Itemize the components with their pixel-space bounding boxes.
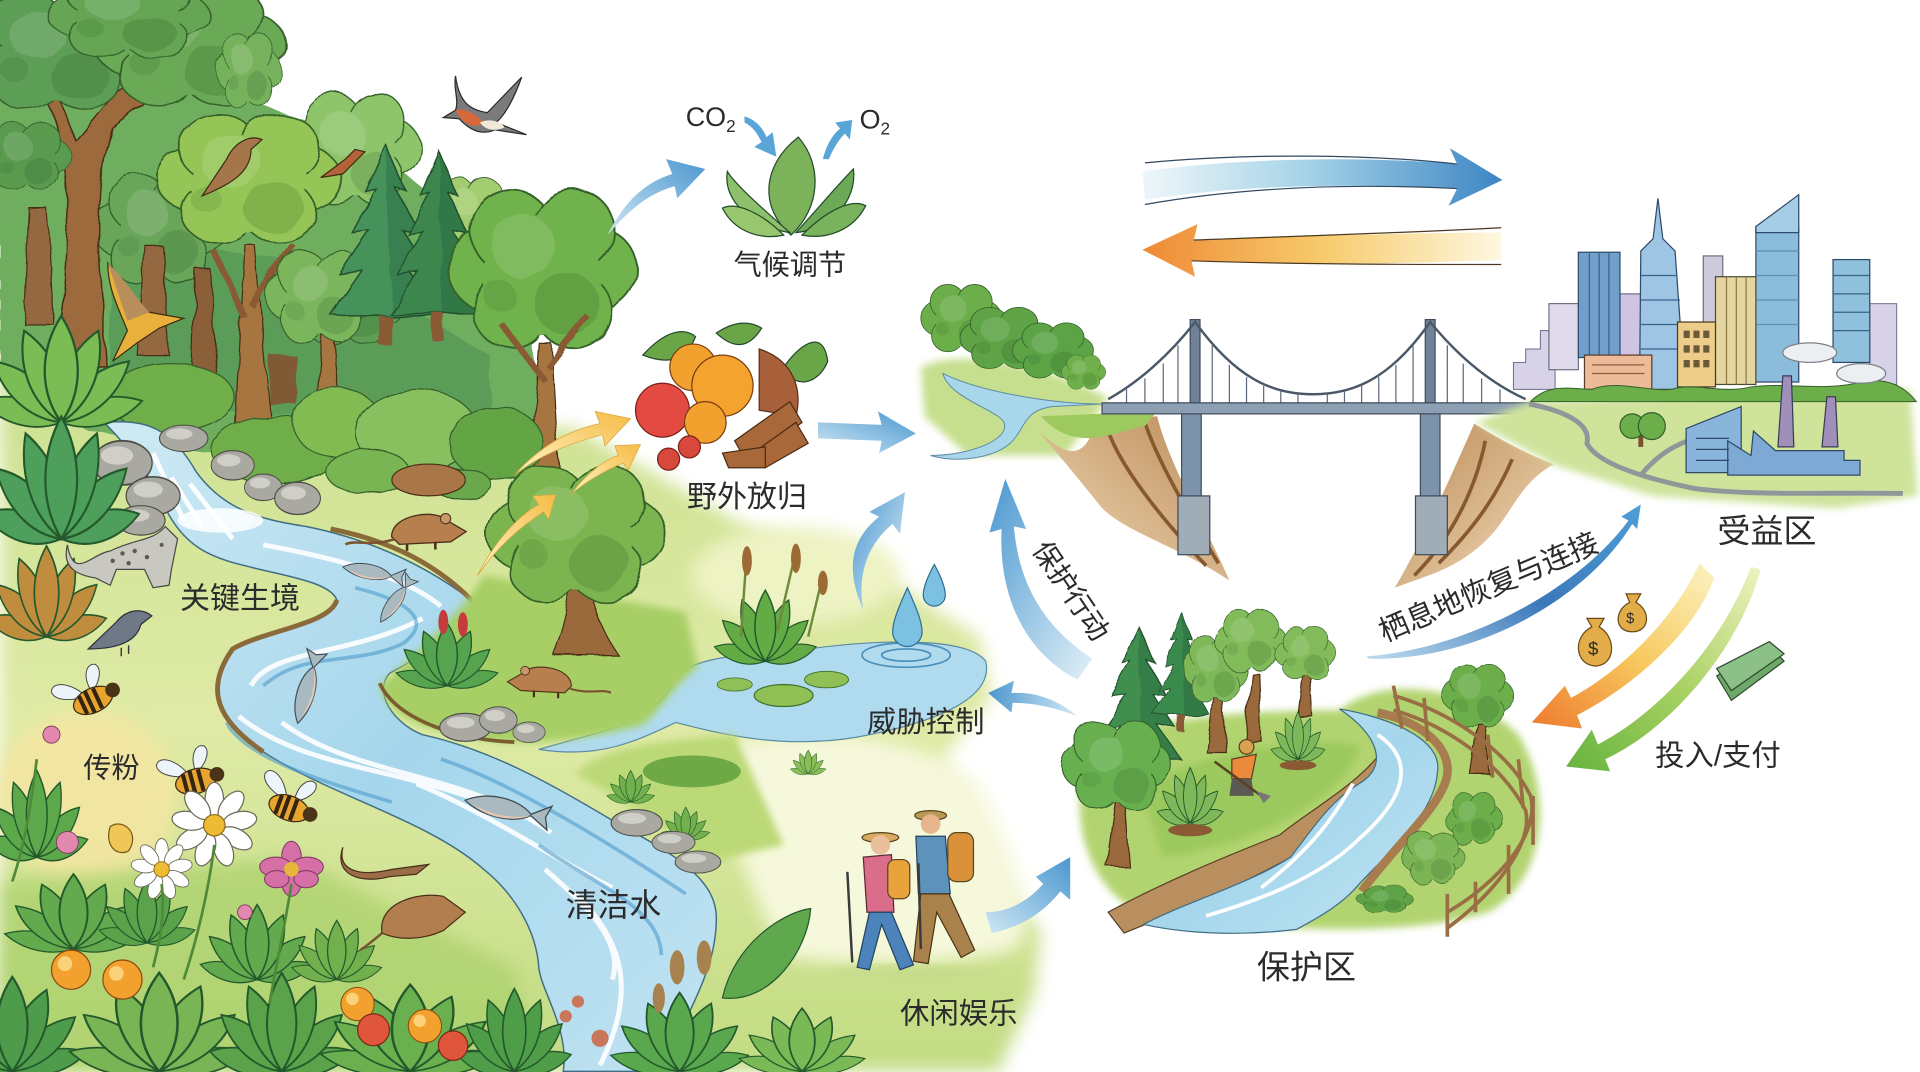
right bank wall [1362,713,1448,891]
bridge [1102,320,1529,555]
conservation land [1080,689,1540,929]
arrow: top left orange [1142,224,1501,277]
panel: conservation area [1062,610,1540,937]
icon: perched brown bird [202,138,262,196]
upland shrubs [606,750,827,842]
icon: small red bird [321,149,365,178]
icon: city skyline [1513,195,1897,389]
river bank left [217,600,337,752]
label: key habitat: 关键生境 [180,583,300,616]
waterfall rocks [93,425,320,535]
icon: orange fruits [51,950,468,1060]
arrow: top right blue [1142,148,1502,206]
icon: flying bird [443,76,527,135]
arrow: conservation action [989,479,1092,680]
icon: burrowing animal [392,464,465,496]
lily pads [717,671,849,707]
lawn [1139,742,1359,857]
label: pollination: 传粉 [83,753,140,784]
island rocks [440,707,545,743]
forest [0,0,637,498]
fence [1393,686,1533,937]
big tree [0,0,285,367]
bottom right reeds and leaves [608,909,867,1072]
icon: planting worker [1215,740,1271,803]
arrow: pond up [853,492,905,610]
label: conservation action: 保护行动 [1026,536,1115,646]
label: beneficiary area: 受益区 [1717,513,1816,550]
right cliff [1395,424,1554,588]
stream to pond [539,642,987,752]
arrow: yellow two [514,411,631,475]
icon: fish group [288,558,552,830]
label: habitat restoration and connection: 栖息地恢复与连接 [1374,526,1604,649]
icon: money bags [1578,594,1646,666]
river ripples [153,453,621,1065]
CO2 label: 2 [726,116,736,136]
label: recreation: 休闲娱乐 [900,998,1018,1031]
pale meadow [722,735,1026,964]
conifers [332,144,487,345]
icon: lizard [341,847,429,879]
label: clean water: 清洁水 [566,887,661,923]
upland bank [576,735,784,863]
icon: seedlings [1156,712,1326,836]
tree line [1531,381,1916,402]
foam [178,508,263,533]
arrow: products to bridge [818,411,916,453]
arrow: yellow three [571,444,640,495]
foreground foliage [0,770,574,1072]
arrow: habitat restoration [1367,504,1641,659]
icon: money bags: $ [1626,611,1634,627]
icon: climate leaves [722,137,866,237]
icon: water drops [893,564,945,647]
icon: small trees [1620,413,1665,447]
arrow: yellow one [478,495,556,575]
road [1529,404,1903,493]
icon: island rodent [507,666,611,698]
left plants [0,316,145,647]
flow arrows [478,116,1761,933]
icon: bees [48,658,328,830]
arrow: green payment [1566,567,1761,771]
arrow: O2 out [823,120,852,159]
O2 label: 2 [881,119,890,139]
CO2 label: CO [686,102,726,132]
trees on bank [1062,610,1513,912]
label: threat control: 威胁控制 [867,706,984,739]
forest backdrop [0,73,545,471]
left cliff [1038,411,1229,580]
bank rocks [611,810,721,873]
icon: rat by stream [345,514,466,551]
lower meadow green [0,857,539,1071]
water highlights [1206,735,1401,916]
panel: bridge and corridor [921,195,1918,588]
background trees [25,94,512,410]
right tree [448,190,637,471]
icon: cash stack [1717,642,1784,700]
arrow: forest to climate [607,159,705,235]
icon: yellow bird [108,263,184,361]
arrow: to threat control [988,681,1078,716]
pale upper meadow [692,527,900,624]
tree on island [486,465,665,655]
arrow: orange investment [1532,563,1714,729]
icon: hikers [827,811,998,982]
arrow: CO2 in [744,116,776,157]
label: climate regulation: 气候调节 [733,249,846,280]
icon: red flower spikes [438,610,468,637]
peach wash near flowers [0,710,178,882]
icon: snow leopard [66,527,178,588]
left plateau [921,284,1108,459]
flowers [12,726,323,1004]
tall tree [157,114,340,435]
stone embankment [1108,752,1381,933]
river [104,422,716,1071]
label: investment and payment: 投入/支付 [1655,739,1781,772]
label: protected area: 保护区 [1257,949,1356,986]
arrow: recreation [986,857,1070,933]
right land [1475,389,1918,508]
O2 label: O [860,105,881,135]
panel: natural ecosystem landscape [0,0,1041,1072]
icon: vole [360,895,465,950]
icon: fruits and wood [636,323,828,470]
river bank right [331,529,471,600]
reeds [712,544,828,670]
icon: money bags: $ [1588,638,1598,659]
label: wild release: 野外放归 [687,481,807,514]
ground wash [0,306,1041,1071]
island [380,575,698,742]
icon: grey bird [88,611,152,656]
water ripples [862,643,950,667]
icon: factory [1686,343,1886,475]
conservation river [1144,709,1438,933]
understory bushes [108,364,542,498]
mid tree [266,250,376,410]
labels [83,249,1816,1031]
island plant [394,623,500,693]
icon: stones in stream [560,995,609,1047]
dark understory band [110,233,490,429]
